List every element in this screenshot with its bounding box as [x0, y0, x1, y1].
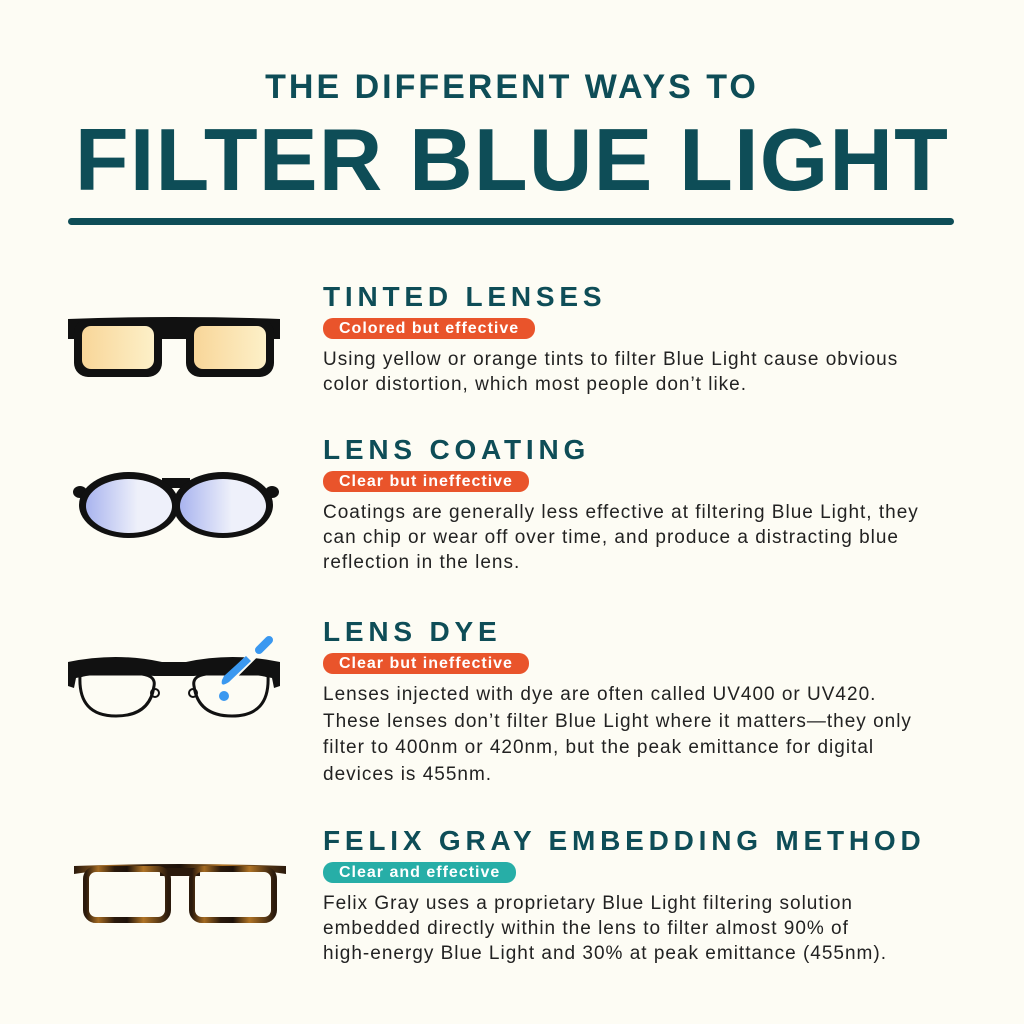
text: filter to 400nm or 420nm, but the peak emittance for digital	[323, 737, 874, 758]
section: Felix Gray embedding	[323, 825, 926, 964]
heading: LENS COATING	[323, 434, 590, 465]
icon: coated glasses	[73, 472, 279, 538]
text	[323, 893, 887, 964]
text	[323, 349, 898, 395]
icon: Felix Gray glasses	[74, 864, 286, 923]
badge	[323, 471, 529, 492]
text: Using yellow or orange tints to filter Blue Light cause obvious	[323, 349, 898, 370]
section: lens coating	[323, 434, 919, 573]
badge	[323, 653, 529, 674]
heading: FELIX GRAY EMBEDDING METHOD	[323, 825, 926, 856]
text: reflection in the lens.	[323, 552, 520, 573]
section: tinted lenses	[323, 281, 898, 395]
text: Lenses injected with dye are often called UV400 or UV420.	[323, 684, 876, 705]
badge: Colored but effective	[339, 320, 519, 337]
text: These lenses don’t filter Blue Light where it matters—they only	[323, 710, 912, 732]
badge: Clear but ineffective	[339, 473, 513, 490]
heading: LENS DYE	[323, 616, 501, 647]
badge: Clear but ineffective	[339, 655, 513, 672]
badge	[323, 862, 516, 883]
text: Coatings are generally less effective at filtering Blue Light, they	[323, 502, 919, 523]
text: devices is 455nm.	[323, 764, 492, 784]
text: embedded directly within the lens to filter almost 90% of	[323, 918, 849, 939]
badge	[323, 318, 535, 339]
heading: TINTED LENSES	[323, 281, 606, 312]
title line 1: THE DIFFERENT WAYS TO	[265, 68, 759, 106]
text	[323, 502, 919, 573]
icon: tinted glasses	[68, 317, 280, 377]
badge: Clear and effective	[339, 864, 500, 881]
text: high-energy Blue Light and 30% at peak emittance (455nm).	[323, 943, 887, 964]
section: lens dye	[323, 616, 912, 784]
icon: dye glasses	[68, 636, 280, 718]
text: Felix Gray uses a proprietary Blue Light filtering solution	[323, 893, 853, 914]
title line 2: FILTER BLUE LIGHT	[75, 110, 949, 209]
text	[323, 684, 912, 784]
text: color distortion, which most people don’t like.	[323, 374, 747, 395]
text: can chip or wear off over time, and produce a distracting blue	[323, 527, 899, 548]
